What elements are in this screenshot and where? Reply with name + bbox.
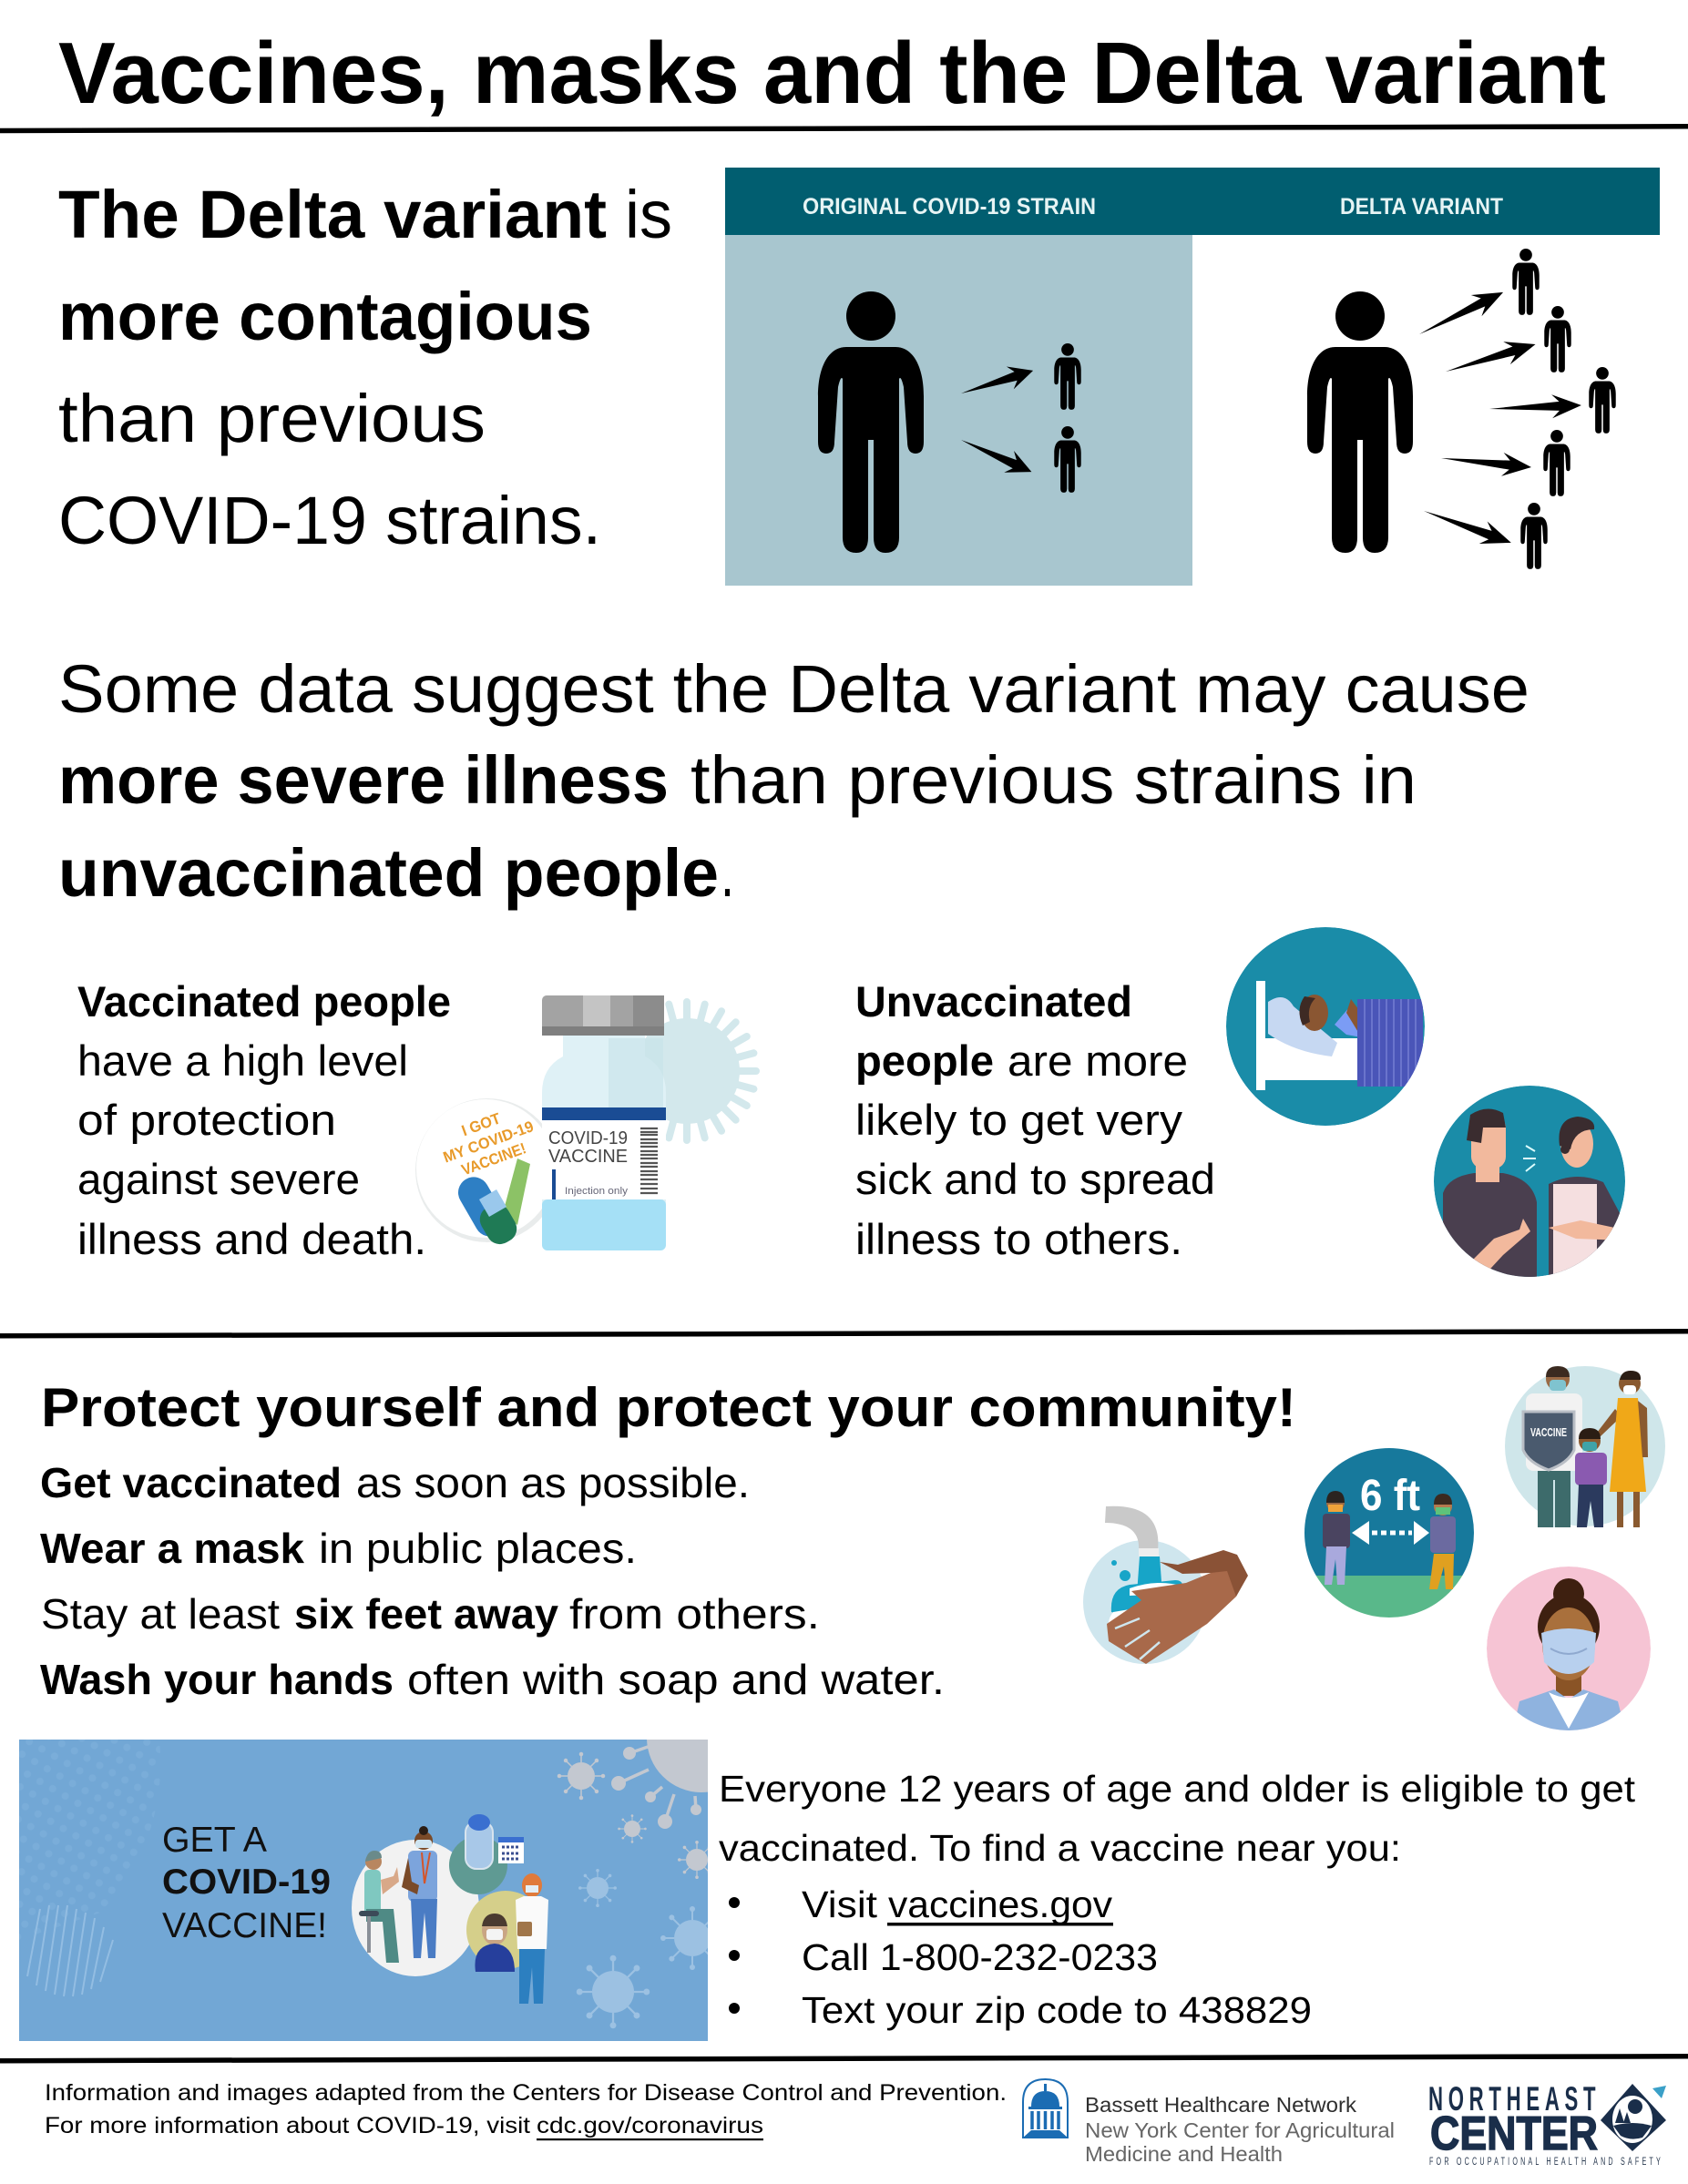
- footer: sources: For more information about COVID-19, visit: [45, 2113, 530, 2138]
- logo: Northeast Center: CENTER: [1430, 2107, 1598, 2160]
- text block: severe illness: [58, 651, 1529, 911]
- text block: vaccine eligibility: vaccinated. To find a vaccine near you:: [719, 1827, 1401, 1869]
- text block: Delta is more contagious: than previous: [58, 381, 486, 456]
- title: Vaccines, masks and the Delta variant: [58, 25, 1606, 122]
- list: ways to find a vaccine: vaccines.gov: [888, 1883, 1113, 1925]
- logo text: Medicine and Health: [1085, 2142, 1283, 2166]
- text block: Delta is more contagious: COVID-19 strains.: [58, 483, 601, 558]
- text block: vaccinated people: Vaccinated people: [77, 977, 451, 1026]
- footer: sources: [45, 2080, 1007, 2140]
- heading: protect yourself: Protect yourself and protect your community!: [41, 1377, 1296, 1438]
- text block: Delta is more contagious: more contagious: [58, 279, 592, 354]
- label text: Injection only: [565, 1186, 629, 1197]
- text block: vaccinated people: have a high level: [77, 1036, 408, 1085]
- text block: vaccinated people: illness and death.: [77, 1215, 426, 1263]
- six feet label: 6 ft: [1360, 1472, 1420, 1520]
- text block: unvaccinated people: sick and to spread: [855, 1155, 1215, 1203]
- icon: delta variant spread: [1307, 249, 1616, 569]
- text block: vaccinated people: against severe: [77, 1155, 360, 1203]
- logo text: Bassett Healthcare Network: [1085, 2093, 1357, 2117]
- logo: Northeast Center: NORTHEAST: [1428, 2080, 1596, 2118]
- icon: original strain spread: [818, 291, 1081, 553]
- icon: hand washing: [1083, 1506, 1248, 1664]
- text block: vaccinated people: of protection: [77, 1096, 336, 1144]
- banner text: COVID-19: [162, 1863, 331, 1902]
- icon: person coughing near another: [1434, 1086, 1626, 1280]
- panel: transmission comparison chart: [725, 168, 1660, 586]
- sticker text: MY COVID-19: [441, 1118, 536, 1167]
- sticker text: VACCINE!: [459, 1139, 528, 1179]
- text block: Delta is more contagious: The Delta variant: [58, 177, 607, 252]
- icon: sick person in bed: [1226, 927, 1425, 1126]
- text block: protective actions list: [40, 1459, 945, 1703]
- list: ways to find a vaccine: Visit: [802, 1883, 878, 1925]
- text block: severe illness: .: [721, 835, 734, 911]
- text block: vaccinated people: [77, 977, 451, 1263]
- text block: unvaccinated people: are more: [1008, 1036, 1188, 1085]
- list: ways to find a vaccine: Call 1-800-232-0233: [802, 1936, 1158, 1978]
- text block: unvaccinated people: likely to get very: [855, 1096, 1183, 1144]
- logo: Northeast Center: FOR OCCUPATIONAL HEALTH AND SAFETY: [1429, 2156, 1661, 2169]
- text block: protective actions list: Wash your hands: [40, 1656, 394, 1703]
- text block: protective actions list: in public places.: [319, 1525, 637, 1572]
- logo: Northeast Center: [1428, 2080, 1666, 2169]
- label text: [548, 1128, 629, 1197]
- text block: Delta is more contagious: is: [625, 177, 672, 252]
- text block: protective actions list: Wear a mask: [40, 1525, 304, 1572]
- icon: woman wearing mask: [1487, 1567, 1651, 1730]
- text block: unvaccinated people: [855, 977, 1215, 1263]
- list: ways to find a vaccine: [729, 1883, 1312, 2031]
- logo text: New York Center for Agricultural: [1085, 2118, 1395, 2142]
- text block: severe illness: Some data suggest the Delta variant may cause: [58, 651, 1529, 727]
- list: ways to find a vaccine: Text your zip code to 438829: [802, 1989, 1312, 2031]
- text block: vaccine eligibility: Everyone 12 years of age and older is eligible to get: [719, 1768, 1636, 1810]
- footer: sources: cdc.gov/coronavirus: [537, 2113, 763, 2138]
- text block: unvaccinated people: Unvaccinated: [855, 977, 1132, 1026]
- label text: COVID-19: [548, 1128, 628, 1148]
- shield label: VACCINE: [1530, 1425, 1567, 1439]
- label text: VACCINE: [548, 1147, 628, 1167]
- panel: get a COVID-19 vaccine banner: [19, 1740, 708, 2041]
- text block: protective actions list: Stay at least: [41, 1590, 280, 1638]
- banner text: VACCINE!: [162, 1906, 327, 1945]
- text block: unvaccinated people: people: [855, 1036, 994, 1085]
- text block: severe illness: than previous strains in: [691, 742, 1417, 818]
- text block: severe illness: unvaccinated people: [58, 835, 719, 911]
- footer: sources: Information and images adapted from the Centers for Disease Control and Prevention.: [45, 2080, 1007, 2106]
- text block: vaccine eligibility: [719, 1768, 1636, 1869]
- sticker text: I GOT: [459, 1109, 504, 1139]
- icon: family behind vaccine shield: [1505, 1366, 1665, 1527]
- text block: protective actions list: often with soap and water.: [407, 1656, 945, 1703]
- text block: Delta is more contagious: [58, 177, 672, 558]
- text block: unvaccinated people: illness to others.: [855, 1215, 1182, 1263]
- icon: vaccine vial with sticker: [415, 995, 756, 1250]
- text block: protective actions list: from others.: [569, 1590, 820, 1638]
- banner text: [162, 1821, 331, 1945]
- text block: protective actions list: as soon as possible.: [356, 1459, 750, 1506]
- text block: severe illness: more severe illness: [58, 742, 669, 818]
- banner text: GET A: [162, 1821, 267, 1860]
- logo text: [1085, 2093, 1395, 2166]
- heading: delta variant: DELTA VARIANT: [1340, 194, 1503, 219]
- heading: original strain: ORIGINAL COVID-19 STRAIN: [803, 194, 1096, 219]
- text block: protective actions list: Get vaccinated: [40, 1459, 342, 1506]
- icon: six feet distance: [1304, 1448, 1475, 1618]
- text block: protective actions list: six feet away: [294, 1590, 558, 1638]
- logo: Bassett Healthcare Network: [1022, 2079, 1395, 2166]
- banner illustration: vaccination scene: [352, 1814, 548, 2004]
